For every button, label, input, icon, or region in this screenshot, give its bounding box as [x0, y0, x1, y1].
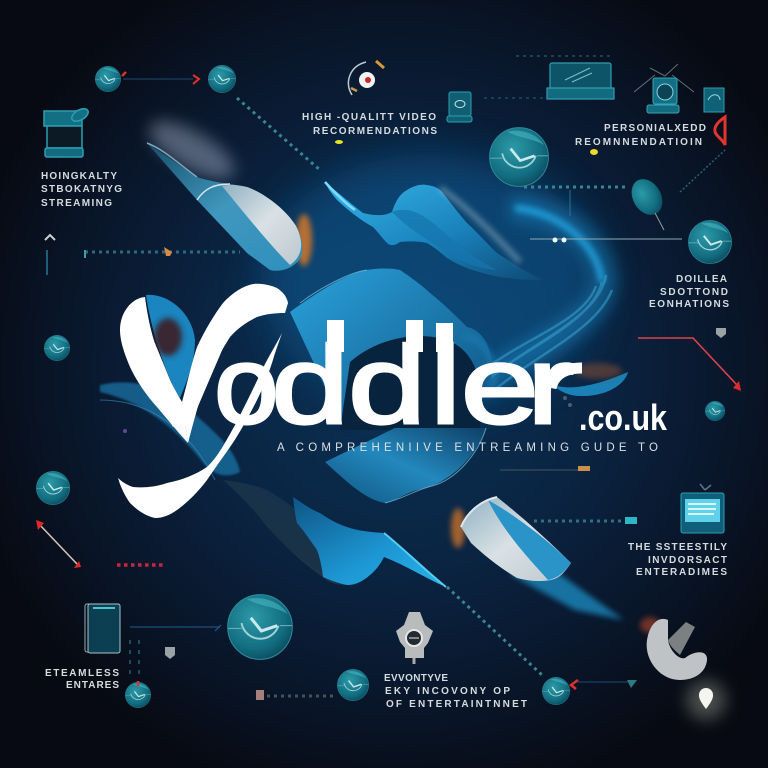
logo text: ddler: r [527, 323, 574, 447]
icon: box [44, 106, 90, 157]
central glow [260, 155, 600, 405]
icon: grey shape [640, 617, 707, 680]
logo ascender extensions [327, 320, 453, 352]
text: seamless: ENTARES [66, 680, 119, 691]
knife shape: top left [141, 110, 312, 271]
text: right column [649, 274, 729, 310]
icon: map pin [686, 680, 726, 720]
logo r terminal [551, 368, 582, 388]
text: personalized recommendation [575, 123, 706, 148]
icon: red bracket [715, 117, 725, 145]
arrow: top link between globes [122, 72, 199, 84]
dotted connectors [85, 56, 725, 696]
ribbon: bottom wave [223, 480, 446, 587]
icon: hydrant [396, 612, 433, 664]
logo flourish: right arm [182, 284, 288, 443]
ribbon: large swirl on the right [476, 190, 612, 392]
text: right column: SDOTTOND [660, 287, 728, 298]
ribbon: top-right blue wave [325, 182, 543, 280]
text: seamless [45, 668, 119, 691]
logo text: ddler: l [430, 323, 461, 447]
text: seamless: ETEAMLESS [45, 668, 119, 679]
logo text: Vo: V [130, 293, 232, 456]
logo text: Vo: o [214, 324, 278, 446]
icon: target [348, 61, 384, 95]
white line with dots [530, 238, 682, 242]
ribbon behind the V [100, 382, 240, 480]
text: entertainment: INVDORSACT [648, 555, 727, 566]
icon: laptop [547, 63, 614, 99]
text: high quality video recommendations: RECORMENDATIONS [313, 126, 437, 137]
text: right column: DOILLEA [676, 274, 727, 285]
text: right column: EONHATIONS [649, 299, 729, 310]
text: evolving [384, 673, 527, 710]
icon: small tablet right [704, 88, 724, 112]
text: high quality video recommendations: HIGH -QUALITT VIDEO [302, 112, 436, 123]
text: evolving: EVVONTYVE [384, 673, 448, 684]
arrow: link to large globe [130, 625, 221, 631]
icon: small tablet center [447, 92, 472, 122]
text: streaming: STREAMING [41, 198, 112, 209]
logo text: ddler: d [271, 323, 349, 447]
icon: monitor [681, 484, 724, 533]
text: personalized recommendation: REOMNNENDATIOIN [575, 137, 702, 148]
arrow: red line left [36, 520, 81, 568]
text: entertainment: ENTERADIMES [636, 567, 727, 578]
text: streaming: STBOKATNYG [41, 184, 122, 195]
logo wordmark [118, 284, 582, 518]
red dashed line [117, 563, 165, 567]
text: evolving: EKY INCOVONY OP [385, 686, 510, 697]
arrow: red chevron and link bottom [571, 680, 637, 689]
text: streaming [41, 171, 122, 209]
icon: tablet bottom left [85, 604, 120, 653]
small accents [45, 140, 637, 700]
text: personalized recommendation: PERSONIALXEDD [604, 123, 706, 134]
icon: leaf globe [625, 174, 669, 230]
icon: globes [36, 65, 732, 708]
text: streaming: HOINGKALTY [41, 171, 117, 182]
knife shape: bottom right [451, 497, 624, 620]
lens by the letter r [553, 363, 628, 407]
text: evolving: OF ENTERTAINTNNET [386, 699, 527, 710]
arrow: red line right [638, 338, 741, 391]
logo flourish: tail and slash [118, 333, 282, 518]
center blue panel [290, 268, 494, 503]
logo text: ddler: e [461, 323, 539, 447]
lens behind the V [146, 295, 195, 398]
icon: machine [634, 64, 694, 113]
tagline: A COMPREHENIIVE ENTREAMING GUDE TO [277, 442, 658, 454]
text: high quality video recommendations [302, 112, 437, 137]
logo suffix: .co.uk [579, 397, 668, 438]
text: entertainment [628, 542, 727, 578]
logo text: ddler: d [348, 323, 426, 447]
text: entertainment: THE SSTEESTILY [628, 542, 727, 553]
logo flourish: calligraphic left arm [120, 297, 188, 443]
icon: small shields [165, 328, 726, 659]
